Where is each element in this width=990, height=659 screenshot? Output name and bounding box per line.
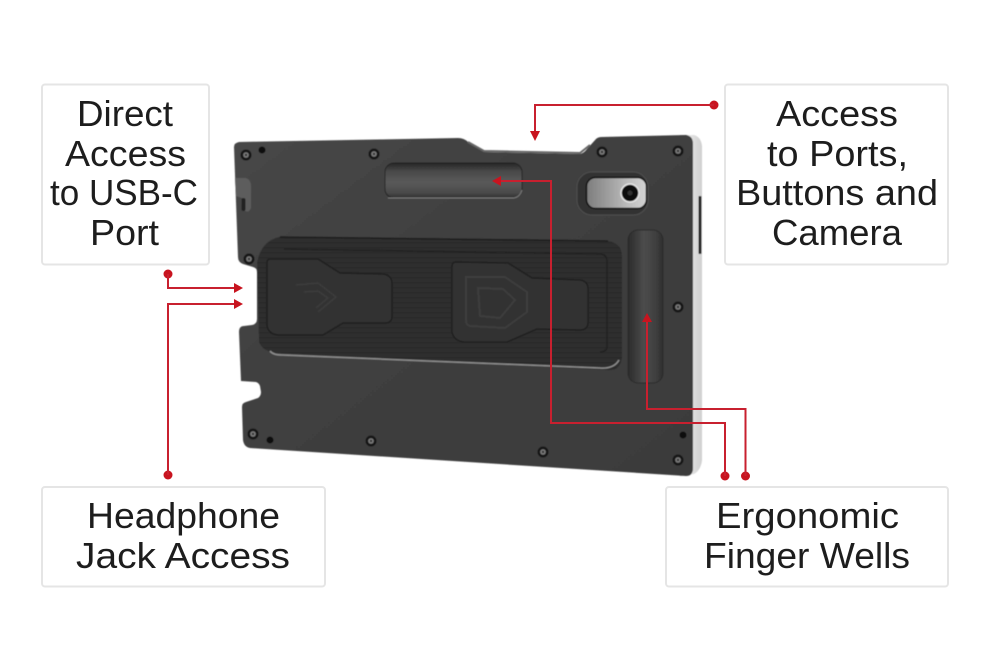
label box: Direct Access to USB-C Port: Port [90,212,159,253]
camera surround [577,172,648,215]
top well highlight [388,190,522,198]
case body [234,135,693,476]
label box: Headphone Jack Access [42,487,325,586]
top finger well [385,163,522,198]
label box: Direct Access to USB-C Port [42,84,209,264]
screw [672,146,684,156]
callout arrow: USB-C port [164,270,243,293]
hole [680,432,686,438]
right finger well [628,230,663,383]
label box: Headphone Jack Access: Jack Access [76,535,290,576]
screw [368,148,380,160]
USB-C port cutout [235,178,251,212]
screw [538,446,548,458]
label box: Access to Ports, Buttons and Camera: to Ports, [767,133,908,174]
callout arrow: side finger well [642,313,750,480]
right pocket emblem [466,277,527,328]
side button [698,196,702,254]
tray inner ledge [284,249,607,352]
screw [244,254,254,264]
hole [258,146,266,154]
left pocket [267,259,392,335]
label box: Ergonomic Finger Wells [666,487,948,586]
silver tablet edge [680,135,702,476]
tray recess [257,237,622,370]
camera plate [586,178,646,208]
top notch highlight [468,142,590,153]
screw [596,146,608,158]
callout arrow: headphone jack [164,299,243,480]
label box: Access to Ports, Buttons and Camera [725,84,948,264]
left pocket emblem [296,283,336,312]
screw [672,302,684,312]
callout arrow: top finger well [492,176,730,480]
label box: Ergonomic Finger Wells: Ergonomic [716,495,899,536]
label box: Access to Ports, Buttons and Camera: Buttons and [736,172,938,213]
screw [672,454,684,466]
callout arrow: ports, buttons and camera [530,100,718,141]
port slot [242,198,246,211]
label box: Access to Ports, Buttons and Camera: Camera [772,212,903,253]
tray highlight edge [270,351,619,368]
label box: Direct Access to USB-C Port: to USB-C [50,172,198,213]
tablet case photo [234,135,702,476]
screw [248,428,258,440]
camera lens [621,184,639,202]
right pocket [452,262,588,342]
label box: Direct Access to USB-C Port: Access [65,133,186,174]
screw [366,436,376,446]
hole [266,436,274,444]
tray top rim shadow [280,237,608,241]
label box: Headphone Jack Access: Headphone [87,495,280,536]
screw [240,150,252,160]
label box: Direct Access to USB-C Port: Direct [77,93,173,134]
label box: Ergonomic Finger Wells: Finger Wells [704,535,910,576]
label box: Access to Ports, Buttons and Camera: Access [776,93,898,134]
